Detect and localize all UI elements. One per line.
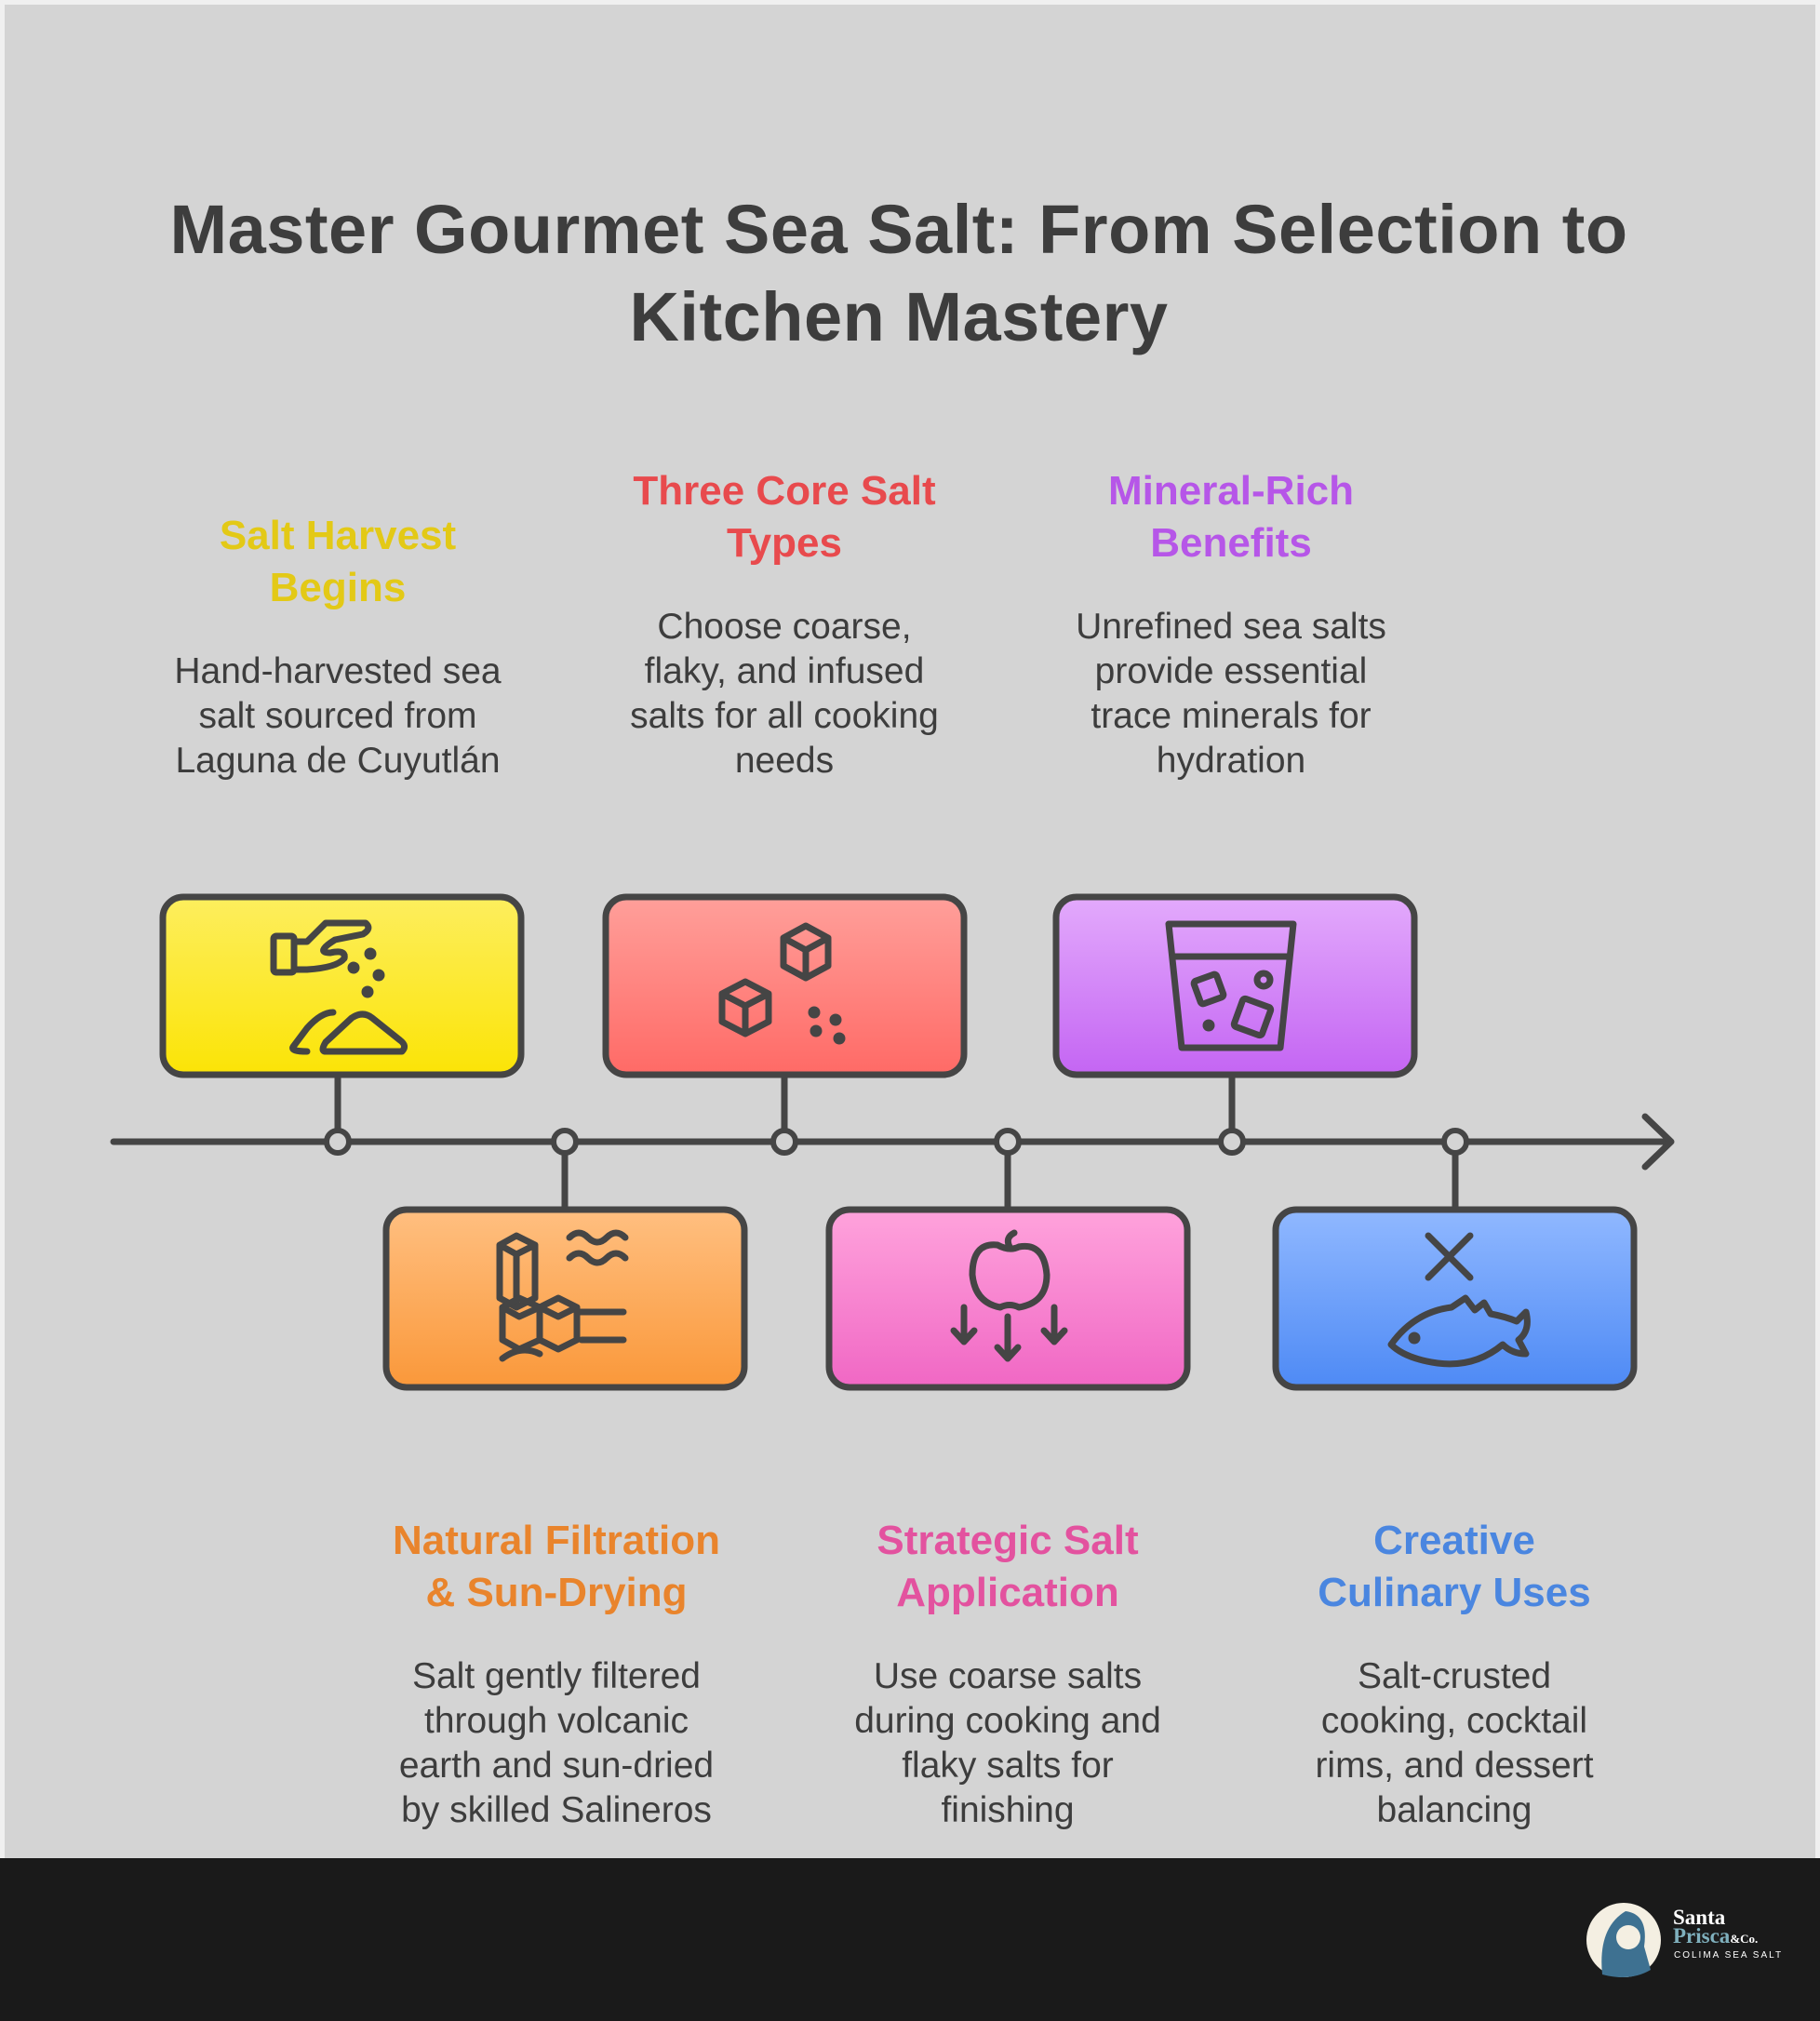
text: mineral-rich benefits: Mineral-Rich <box>1108 468 1354 514</box>
text: mineral-rich benefits: hydration <box>1157 741 1305 781</box>
text: three core salt types: Choose coarse, <box>657 607 912 647</box>
box: salt harvest <box>163 897 521 1075</box>
connectors <box>338 1077 1455 1210</box>
text: salt harvest begins: Salt Harvest <box>220 513 456 558</box>
text: strategic salt application <box>854 1518 1161 1830</box>
icon: glass with ice <box>1169 924 1293 1048</box>
text: natural filtration: through volcanic <box>424 1701 689 1741</box>
text: creative culinary uses: Culinary Uses <box>1318 1570 1591 1615</box>
text: natural filtration: Natural Filtration <box>393 1518 720 1563</box>
text: strategic salt application: during cooking and <box>854 1701 1161 1741</box>
title: Master Gourmet Sea Salt: From Selection to <box>169 191 1628 268</box>
text: creative culinary uses: Salt-crusted <box>1358 1656 1551 1696</box>
box: mineral-rich <box>1056 897 1414 1075</box>
text: natural filtration: by skilled Salineros <box>401 1790 712 1830</box>
text: creative culinary uses: cooking, cocktail <box>1321 1701 1587 1741</box>
box: creative uses <box>1276 1210 1634 1387</box>
text: natural filtration: & Sun-Drying <box>425 1570 688 1615</box>
logo: Santa <box>1673 1906 1725 1929</box>
icon: salt cubes <box>722 926 842 1041</box>
text: salt harvest begins: salt sourced from <box>198 696 477 736</box>
text: strategic salt application: flaky salts for <box>902 1746 1114 1786</box>
icon: fish and cross <box>1391 1236 1527 1364</box>
text: three core salt types: Types <box>727 520 842 566</box>
box: strategic application <box>829 1210 1187 1387</box>
text: creative culinary uses: balancing <box>1377 1790 1532 1830</box>
text: salt harvest begins <box>174 513 502 781</box>
text: strategic salt application: Application <box>896 1570 1119 1615</box>
text: creative culinary uses <box>1315 1518 1594 1830</box>
logo <box>1586 1903 1783 1977</box>
text: salt harvest begins: Begins <box>270 565 406 610</box>
timeline axis arrow <box>114 1117 1671 1167</box>
text: three core salt types: Three Core Salt <box>633 468 936 514</box>
title: Kitchen Mastery <box>629 278 1169 355</box>
text: salt harvest begins: Laguna de Cuyutlán <box>175 741 501 781</box>
text: mineral-rich benefits: provide essential <box>1095 651 1367 691</box>
text: strategic salt application: Strategic Salt <box>877 1518 1139 1563</box>
logo: Prisca&Co. <box>1673 1924 1758 1947</box>
icon: salt blocks and waves <box>500 1233 625 1358</box>
text: salt harvest begins: Hand-harvested sea <box>174 651 502 691</box>
icon: apple with arrows <box>954 1233 1064 1358</box>
text: three core salt types: salts for all cooking <box>630 696 939 736</box>
text: natural filtration: earth and sun-dried <box>399 1746 714 1786</box>
title <box>169 191 1628 355</box>
text: creative culinary uses: rims, and dessert <box>1315 1746 1594 1786</box>
text: mineral-rich benefits: Benefits <box>1150 520 1312 566</box>
text: three core salt types: needs <box>735 741 834 781</box>
text: three core salt types: flaky, and infused <box>645 651 924 691</box>
text: natural filtration <box>393 1518 720 1830</box>
timeline nodes <box>327 1131 1466 1153</box>
text: natural filtration: Salt gently filtered <box>412 1656 701 1696</box>
logo: COLIMA SEA SALT <box>1674 1950 1783 1961</box>
box: natural filtration <box>386 1210 744 1387</box>
text: strategic salt application: finishing <box>941 1790 1075 1830</box>
text: three core salt types <box>630 468 939 781</box>
text: mineral-rich benefits: Unrefined sea salts <box>1076 607 1386 647</box>
text: mineral-rich benefits <box>1076 468 1386 781</box>
text: strategic salt application: Use coarse salts <box>874 1656 1142 1696</box>
icon: hand sprinkling salt <box>274 923 405 1051</box>
box: three core salt types <box>606 897 964 1075</box>
text: mineral-rich benefits: trace minerals for <box>1091 696 1372 736</box>
text: creative culinary uses: Creative <box>1373 1518 1535 1563</box>
